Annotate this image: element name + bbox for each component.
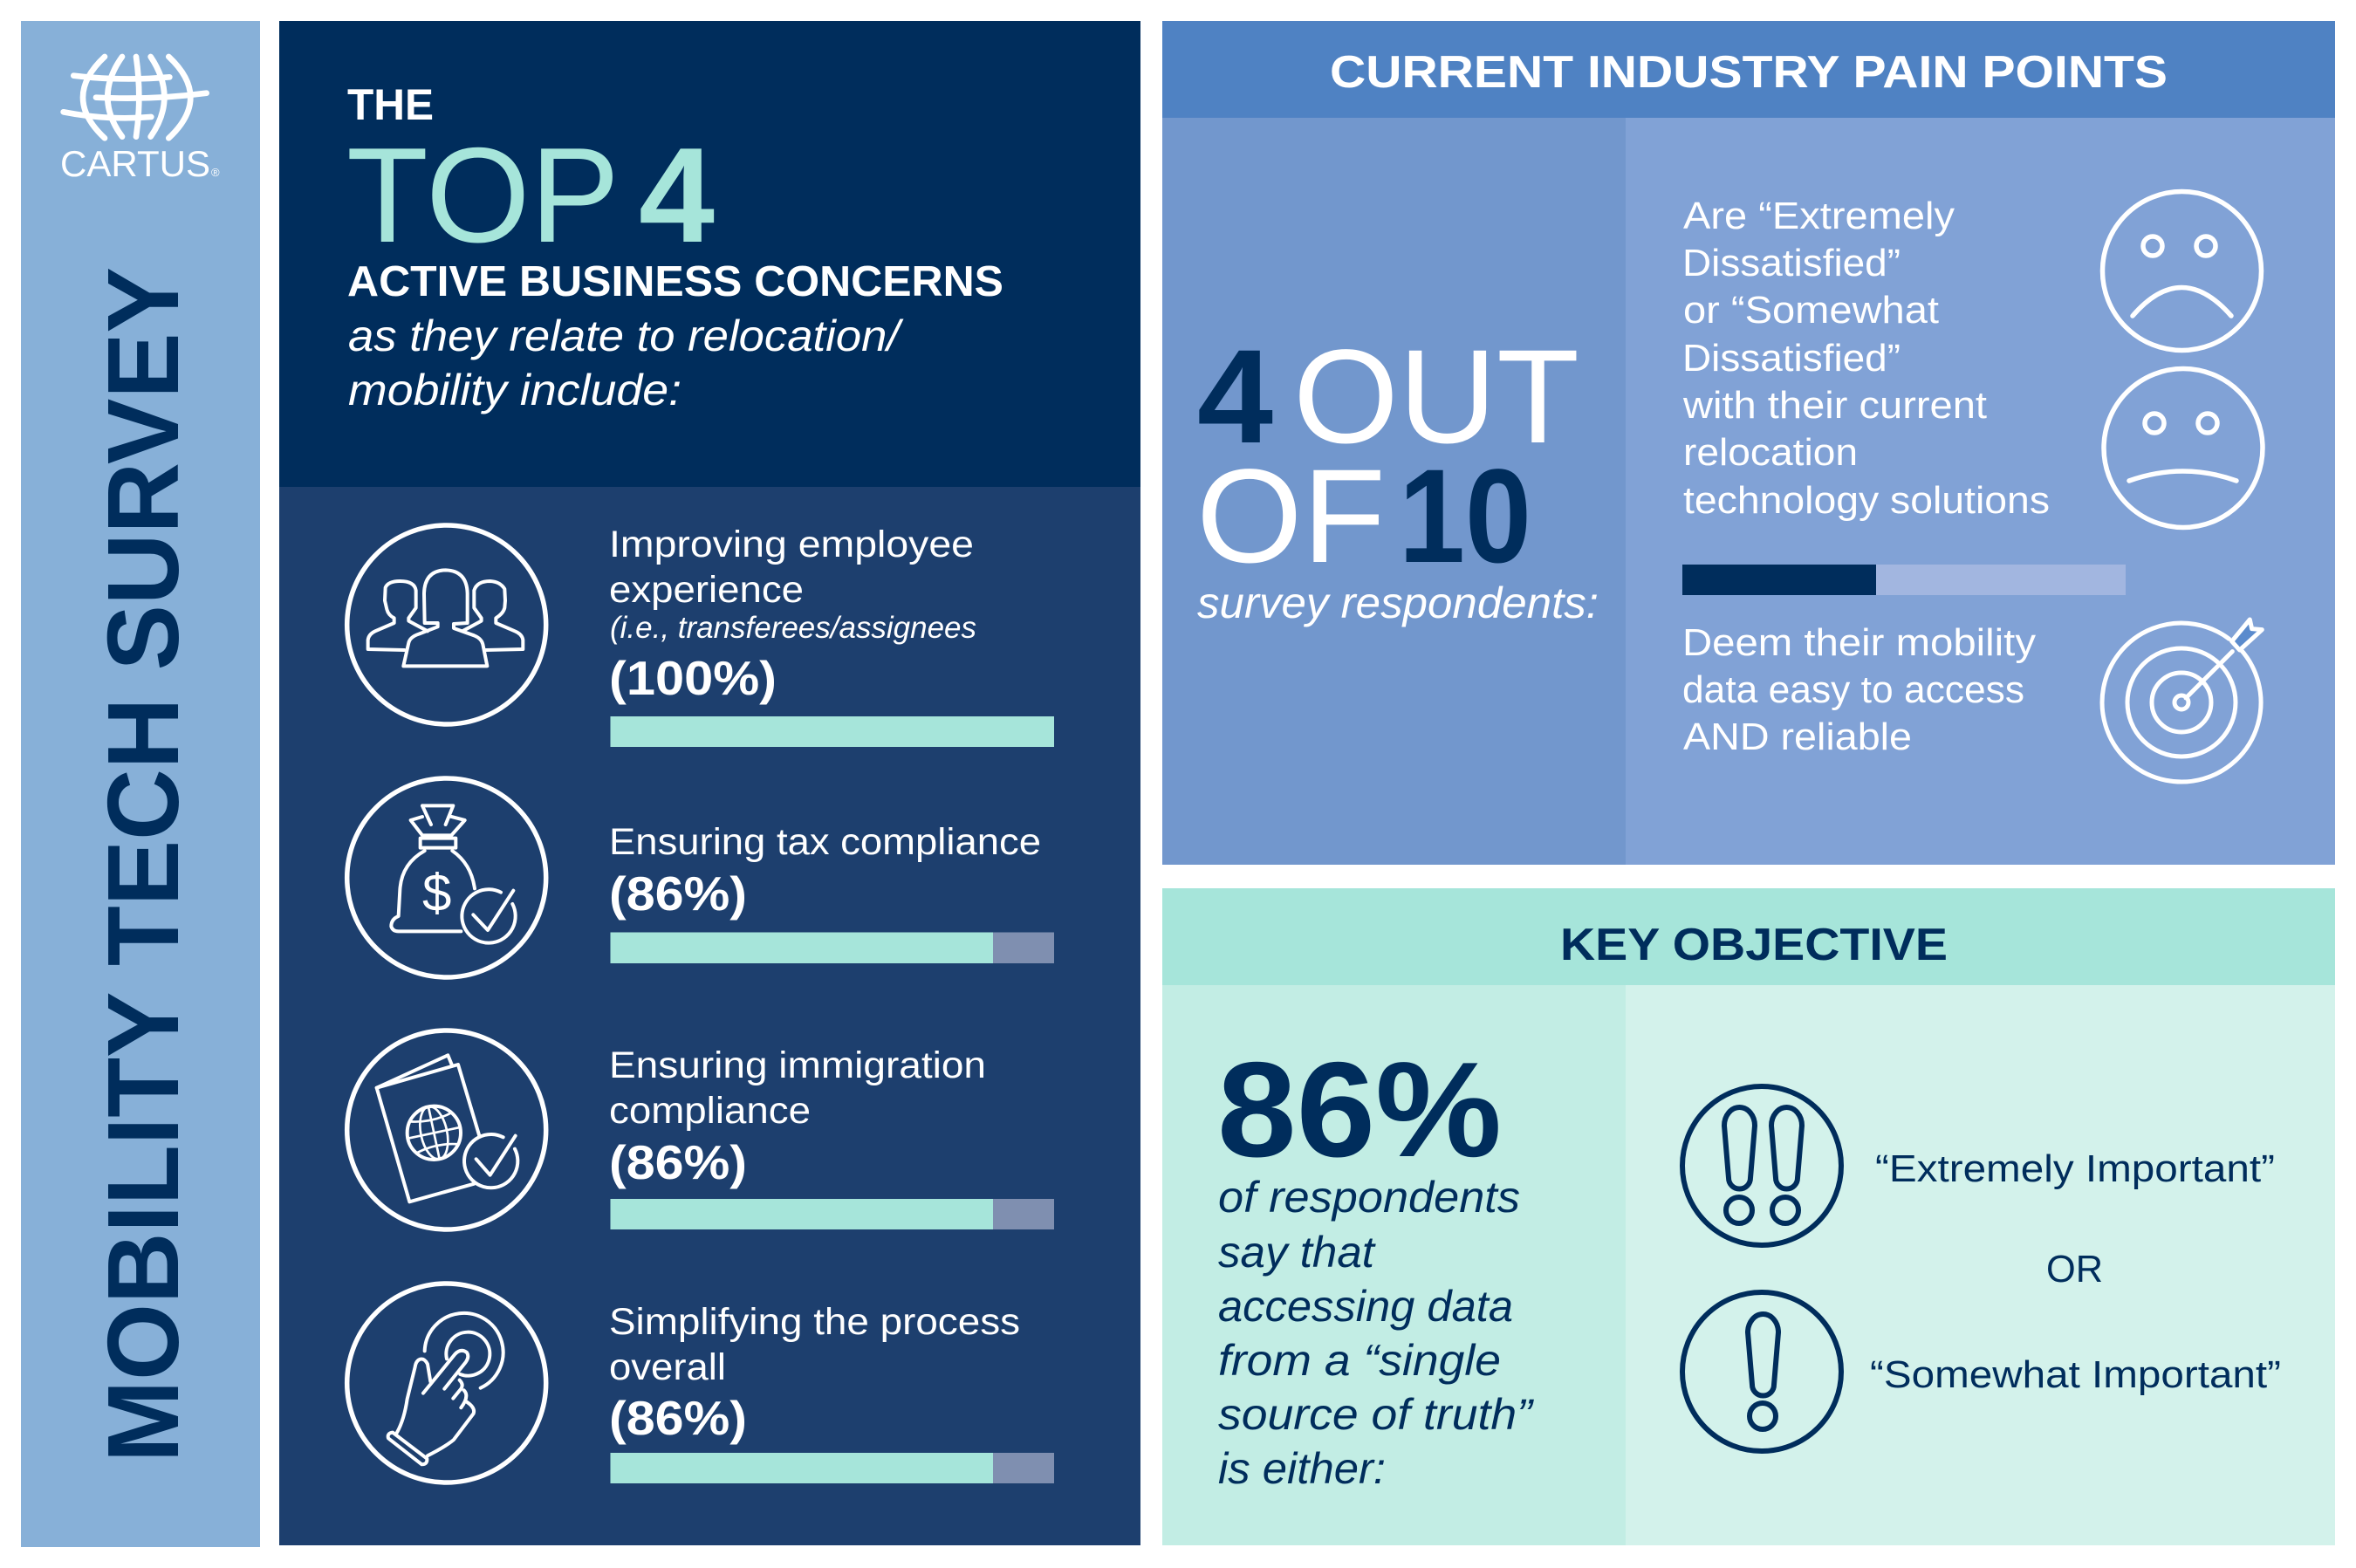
bar: 86% — [611, 1199, 1054, 1229]
heading: the top 4: TOP — [346, 120, 620, 270]
text: respondents statement: from a “single — [1218, 1336, 1501, 1385]
text: relocation subtitle: mobility include: — [348, 366, 681, 414]
heading: active business concerns: ACTIVE BUSINESS CONCERNS — [347, 258, 1003, 305]
heading: the top 4: 4 — [639, 120, 715, 270]
text: dissatisfied: Are “Extremely — [1683, 195, 1955, 237]
panel: sidebar — [21, 21, 260, 1547]
panel: business concerns list — [279, 487, 1140, 1545]
icon: money bag with check: $ — [422, 863, 451, 921]
text: relocation subtitle — [348, 312, 904, 414]
text: mobility data: AND reliable — [1683, 716, 1912, 758]
heading: key objective — [1162, 888, 2335, 985]
stat: 4 out of 10: OUT — [1293, 322, 1579, 471]
stat: 4 out of 10: 10 — [1399, 442, 1531, 591]
text: somewhat important: “Somewhat Important” — [1870, 1353, 2281, 1396]
text: simplifying the process overall: overall — [609, 1346, 726, 1388]
text: dissatisfied: relocation — [1683, 431, 1858, 474]
text: mobility data: Deem their mobility — [1682, 621, 2036, 664]
text: dissatisfied: Dissatisfied” — [1682, 337, 1901, 380]
bar: 100% — [611, 716, 1054, 747]
heading: pain points: CURRENT INDUSTRY PAIN POINTS — [1330, 47, 2168, 98]
text: simplifying the process overall: (86%) — [609, 1391, 747, 1445]
text: improving employee experience — [609, 524, 976, 705]
text: dissatisfied: technology solutions — [1683, 479, 2050, 522]
text: ensuring immigration compliance: (86%) — [609, 1135, 747, 1189]
heading: the top 4 — [346, 80, 715, 270]
icon: slightly sad face — [2104, 368, 2263, 527]
stat: 86%: 86% — [1217, 1034, 1502, 1185]
text: respondents statement: accessing data — [1218, 1282, 1513, 1331]
concern 3: immigration compliance — [347, 1030, 1054, 1229]
text: simplifying the process overall: Simplifying the process — [609, 1301, 1020, 1343]
text: dissatisfied: Dissatisfied” — [1682, 242, 1901, 284]
text: respondents statement: of respondents — [1218, 1173, 1520, 1222]
stat: 4 out of 10 — [1196, 322, 1599, 627]
concern 2: tax compliance — [347, 778, 1054, 977]
panel: top 4 heading — [279, 21, 1140, 487]
text: ensuring immigration compliance — [609, 1044, 986, 1189]
text: improving employee experience: (i.e., transferees/assignees — [610, 611, 976, 645]
text: ensuring immigration compliance: compliance — [609, 1090, 811, 1132]
text: simplifying the process overall — [609, 1301, 1020, 1445]
text: dissatisfied — [1682, 195, 2050, 522]
icon: double exclamation — [1682, 1086, 1841, 1245]
icon: passport with check — [347, 1030, 546, 1229]
stat: 4 out of 10: survey respondents: — [1197, 579, 1599, 627]
text: or: OR — [2046, 1248, 2103, 1291]
icon: Cartus globe logo: ® — [211, 166, 220, 179]
icon: people — [347, 525, 546, 724]
text: respondents statement: is either: — [1218, 1444, 1386, 1493]
bar: 86% — [611, 932, 1054, 963]
heading: key objective: KEY OBJECTIVE — [1560, 920, 1948, 970]
panel: current industry pain points — [1162, 21, 2335, 865]
title: vertical survey heading: MOBILITY TECH SURVEY — [86, 267, 200, 1462]
icon: Cartus globe logo: CARTUS — [60, 143, 210, 184]
bar: 4 out of 10 — [1682, 565, 2126, 595]
text: dissatisfied: with their current — [1682, 384, 1987, 427]
text: mobility data: data easy to access — [1682, 668, 2024, 711]
panel: key objective — [1162, 888, 2335, 1545]
icon: sad face — [2103, 192, 2262, 351]
icon: Cartus globe logo — [60, 57, 220, 184]
stat: 4 out of 10: 4 — [1197, 322, 1273, 471]
text: ensuring tax compliance: (86%) — [609, 866, 747, 921]
text: respondents statement: say that — [1218, 1228, 1376, 1277]
bar: 86% — [611, 1453, 1054, 1483]
text: ensuring tax compliance: Ensuring tax compliance — [609, 821, 1041, 863]
heading: the top 4: THE — [347, 80, 434, 129]
icon: money bag with check — [347, 778, 546, 977]
text: extremely important: “Extremely Important” — [1875, 1147, 2275, 1190]
text: respondents statement — [1218, 1173, 1535, 1493]
text: ensuring immigration compliance: Ensuring immigration — [609, 1044, 986, 1086]
text: improving employee experience: (100%) — [609, 651, 777, 705]
text: ensuring tax compliance — [609, 821, 1041, 921]
icon: target with arrow — [2102, 620, 2262, 782]
text: respondents statement: source of truth” — [1218, 1390, 1535, 1439]
heading: pain points — [1162, 21, 2335, 118]
icon: hand touch — [347, 1284, 546, 1482]
concern 1: employee experience — [347, 524, 1054, 747]
icon: single exclamation — [1682, 1292, 1841, 1451]
text: dissatisfied: or “Somewhat — [1683, 289, 1939, 332]
text: improving employee experience: experience — [609, 569, 804, 611]
text: improving employee experience: Improving employee — [609, 524, 974, 565]
stat: 4 out of 10: OF — [1196, 442, 1386, 591]
text: mobility data — [1682, 621, 2036, 758]
concern 4: simplifying the process — [347, 1284, 1054, 1483]
text: relocation subtitle: as they relate to relocation/ — [348, 312, 904, 360]
